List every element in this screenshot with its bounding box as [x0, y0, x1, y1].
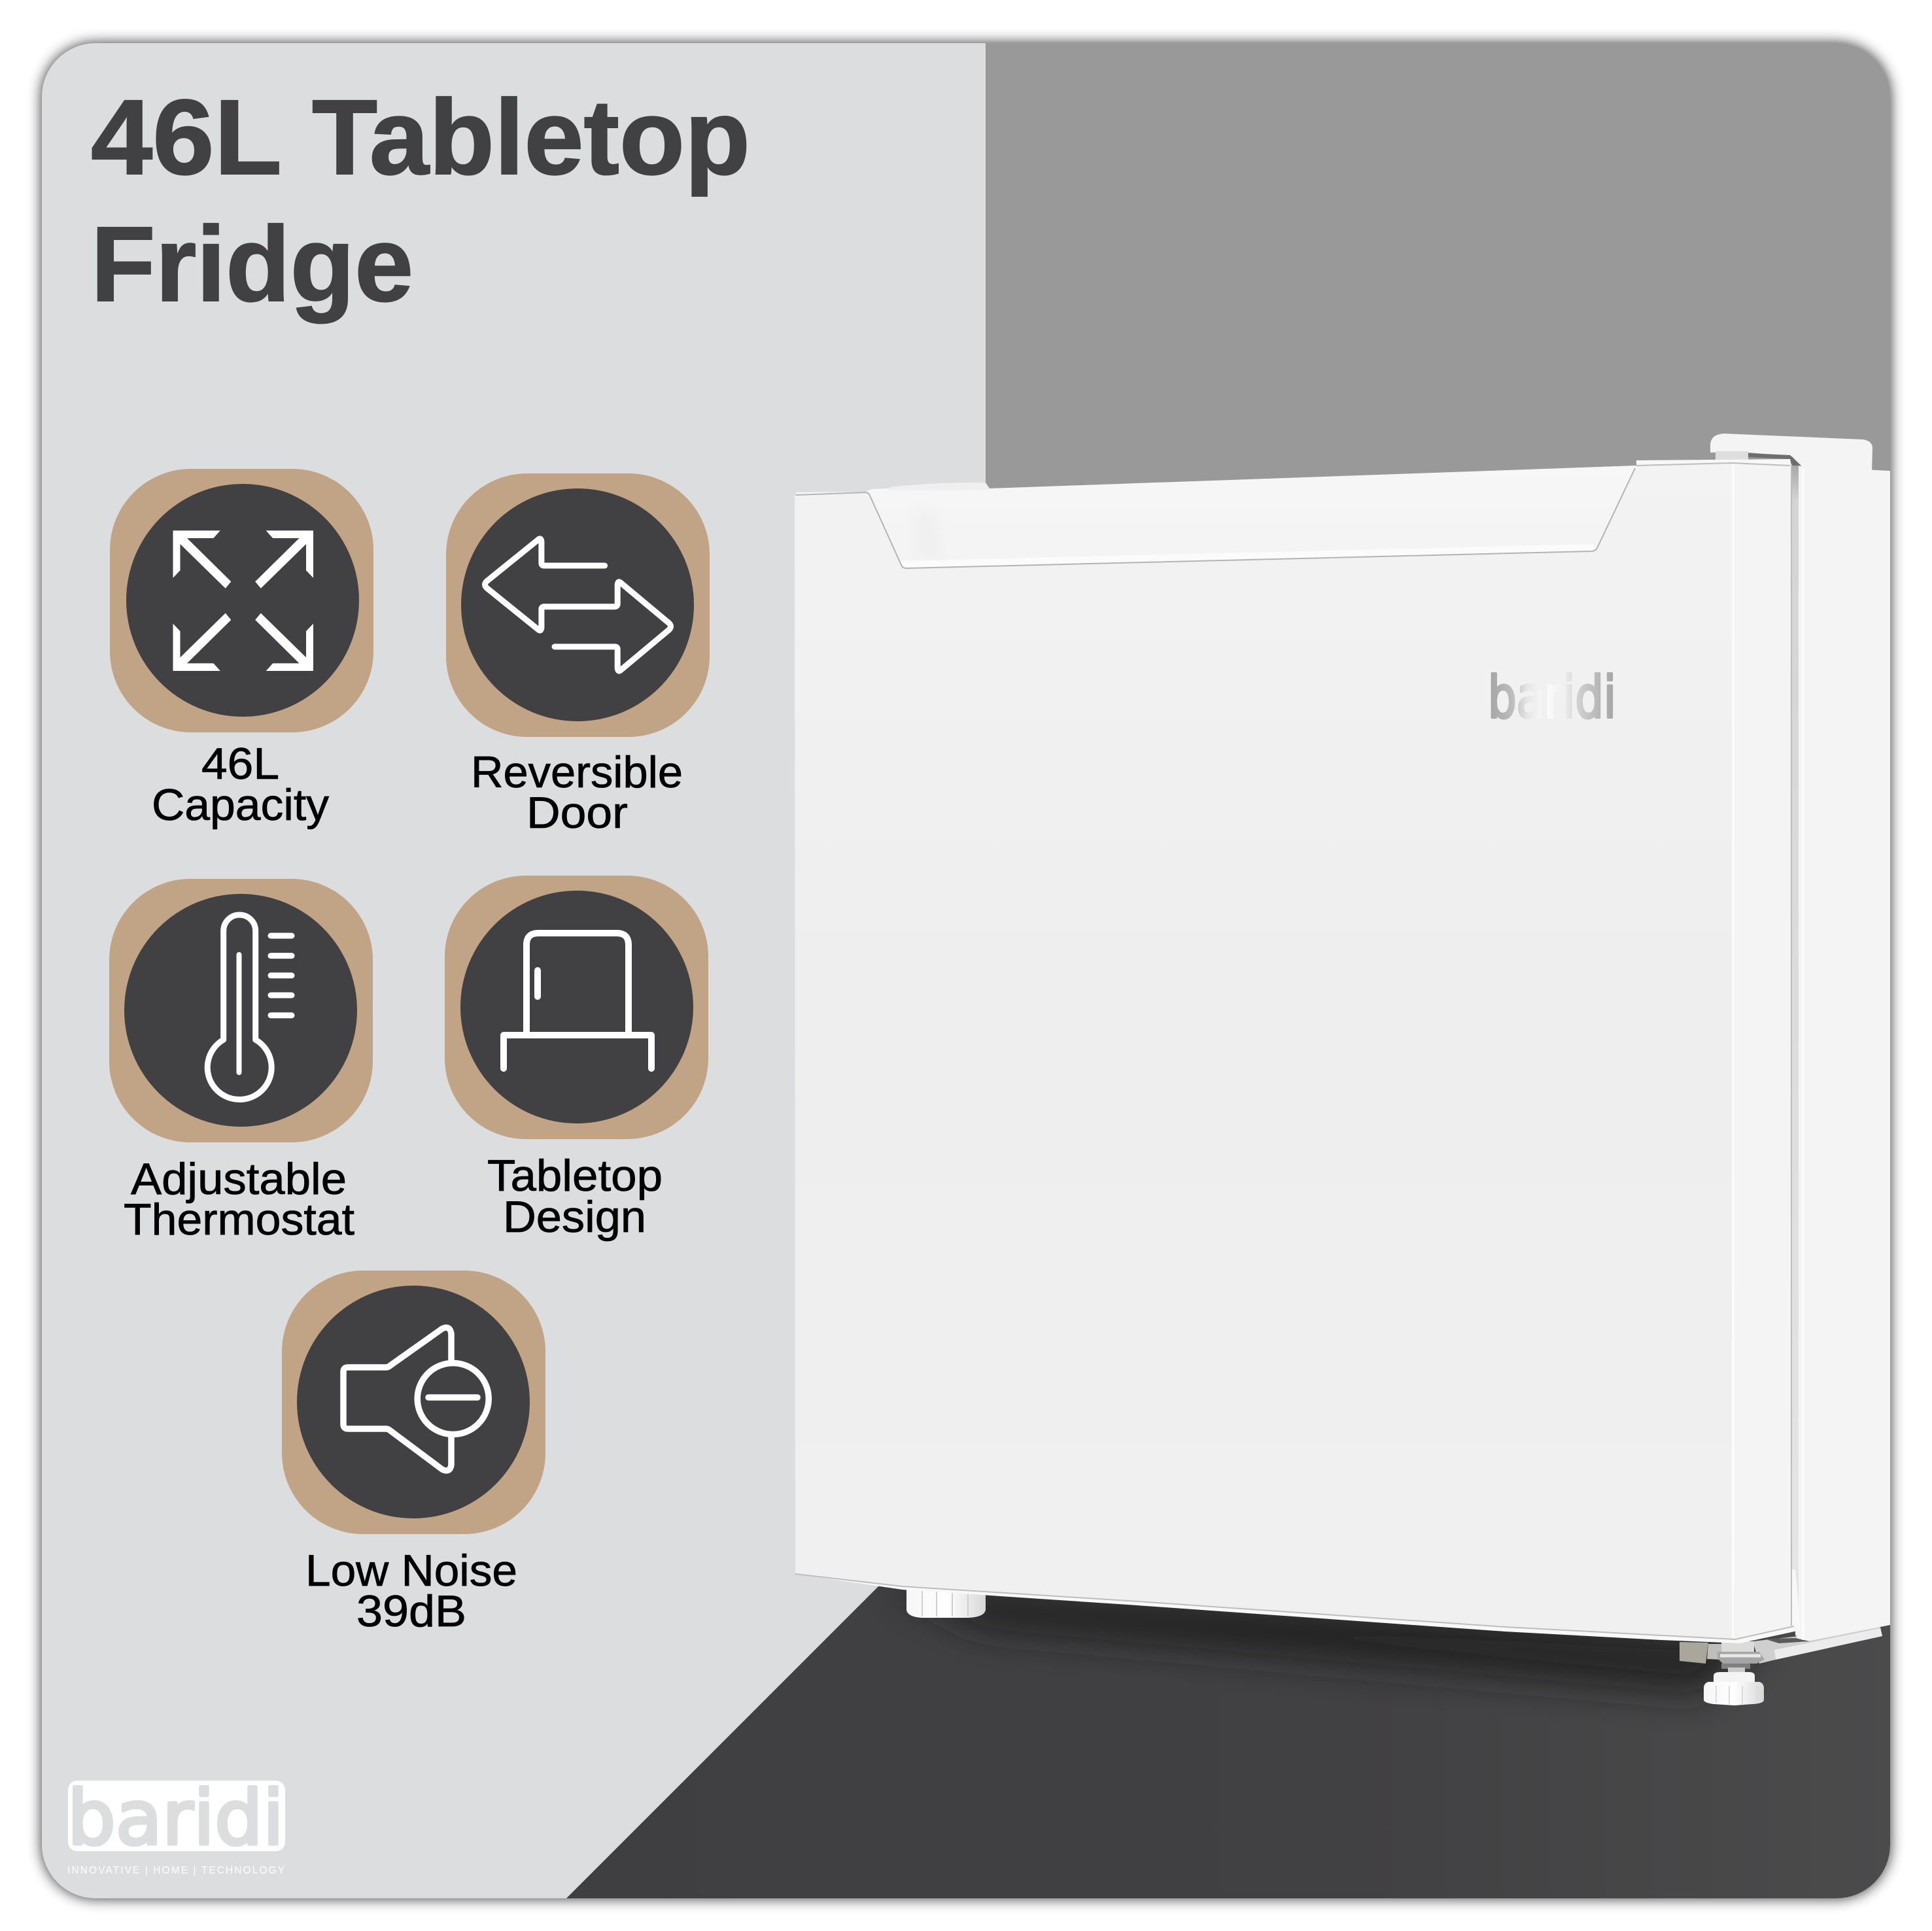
label: [305, 1546, 517, 1636]
fridge door front: [795, 463, 1791, 1639]
badge: [110, 469, 373, 732]
fridge door side bevel: [1733, 463, 1791, 1639]
brand logo: [67, 1775, 285, 1876]
feature: 46L capacity: [110, 469, 373, 830]
icon: expand arrows: [126, 484, 359, 717]
logo wordmark: baridi: [67, 1775, 284, 1862]
icon: opposing arrows: [461, 488, 694, 721]
fridge left foot: [906, 1590, 986, 1618]
logo plate: [68, 1781, 285, 1851]
fridge door top knob: [888, 483, 991, 490]
label: [471, 747, 683, 838]
fridge door top rim: [795, 459, 1792, 504]
feature: low noise: [282, 1271, 545, 1636]
feature: reversible door: [446, 473, 710, 838]
fridge top hinge: [1710, 434, 1872, 472]
label: [487, 1151, 663, 1242]
label: Low Noise: [305, 1546, 517, 1596]
panel: dark floor: [566, 1556, 1890, 1898]
panel: mid grey wall: [986, 43, 1890, 488]
label: Design: [503, 1192, 646, 1242]
label: 46L: [201, 739, 279, 789]
title: Tabletop: [312, 77, 750, 197]
fridge right foot and hinge bracket: [1680, 1627, 1882, 1705]
fridge door rim: [795, 1566, 1801, 1643]
fridge handle recess: [796, 466, 1636, 568]
icon: thermometer: [124, 894, 357, 1127]
label: Door: [526, 788, 628, 838]
label: [152, 739, 329, 830]
badge: [446, 473, 710, 737]
label: Thermostat: [124, 1195, 354, 1244]
title: 46L: [91, 77, 282, 197]
label: Tabletop: [487, 1151, 663, 1201]
label: 39dB: [356, 1586, 466, 1636]
icon: fridge on table: [460, 891, 693, 1123]
fridge door logo: baridi: [1488, 664, 1616, 731]
label: Capacity: [152, 780, 329, 830]
icon: speaker with minus: [297, 1286, 530, 1518]
fridge door outline: [795, 463, 1794, 1639]
badge: [445, 876, 708, 1139]
badge: [109, 879, 373, 1142]
label: [124, 1154, 354, 1244]
fridge contact shadow: [889, 1586, 1766, 1694]
fridge side body: [1795, 466, 1890, 1643]
fridge bottom gap sliver: [1764, 1638, 1810, 1643]
label: Reversible: [471, 747, 683, 797]
feature: tabletop design: [445, 876, 708, 1242]
fridge door edge lines: [1733, 464, 1803, 1640]
title: Fridge: [91, 204, 413, 324]
badge: [282, 1271, 545, 1534]
label: Adjustable: [131, 1154, 347, 1204]
logo tagline: INNOVATIVE | HOME | TECHNOLOGY: [67, 1865, 285, 1876]
title: [91, 77, 750, 324]
fridge door-to-body gap: [1792, 466, 1799, 1605]
illustration: fridge: [795, 434, 1890, 1705]
feature: adjustable thermostat: [109, 879, 373, 1244]
